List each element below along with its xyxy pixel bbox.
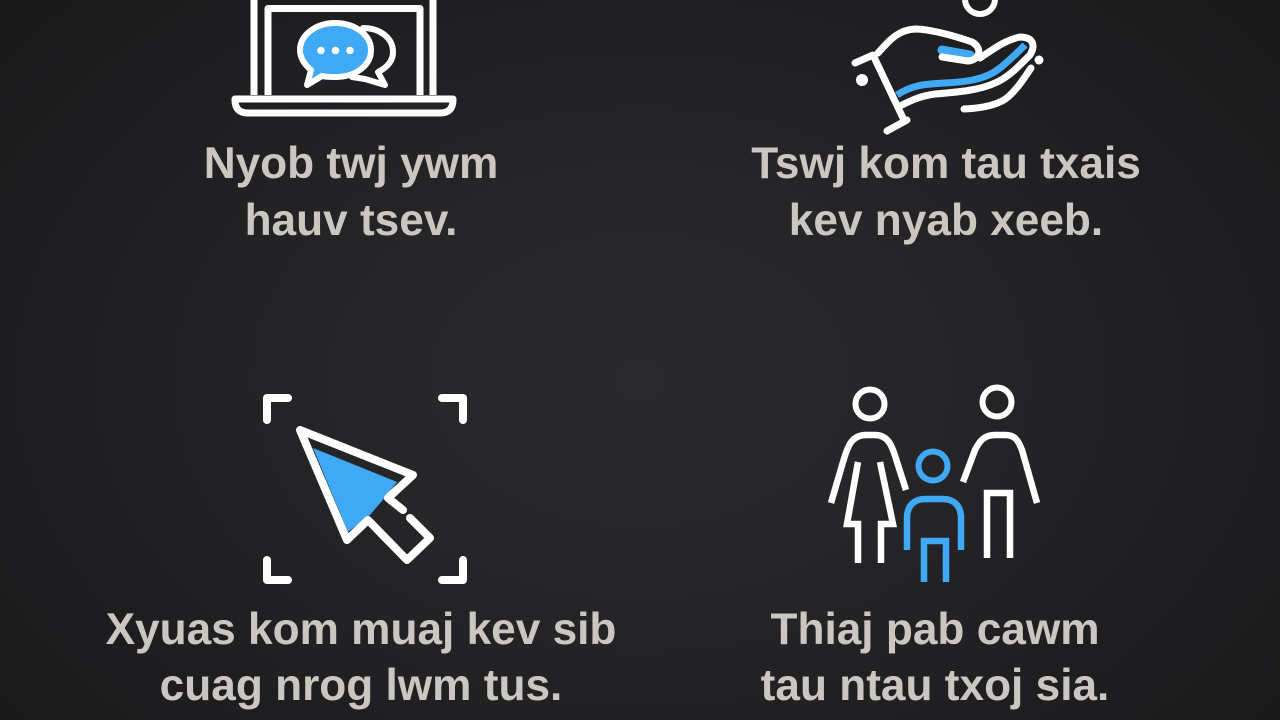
caption: bottom left: cuag nrog lwm tus. — [160, 661, 562, 710]
caption: bottom right: Thiaj pab cawm — [770, 605, 1100, 654]
icon: family — [831, 388, 1037, 582]
caption: bottom left: Xyuas kom muaj kev sib — [106, 605, 616, 654]
caption: bottom right — [761, 605, 1109, 710]
caption: top left — [204, 139, 498, 245]
caption: bottom right: tau ntau txoj sia. — [761, 661, 1109, 710]
caption: top right: kev nyab xeeb. — [789, 196, 1103, 245]
caption: top right — [751, 139, 1141, 245]
caption: top left: hauv tsev. — [245, 196, 457, 245]
icon: laptop with chat bubbles — [235, 0, 453, 113]
icon: cursor in selection frame — [267, 398, 463, 580]
caption: top right: Tswj kom tau txais — [751, 139, 1141, 188]
icon: hand with coin — [855, 0, 1044, 131]
caption: top left: Nyob twj ywm — [204, 139, 498, 188]
caption: bottom left — [106, 605, 616, 710]
